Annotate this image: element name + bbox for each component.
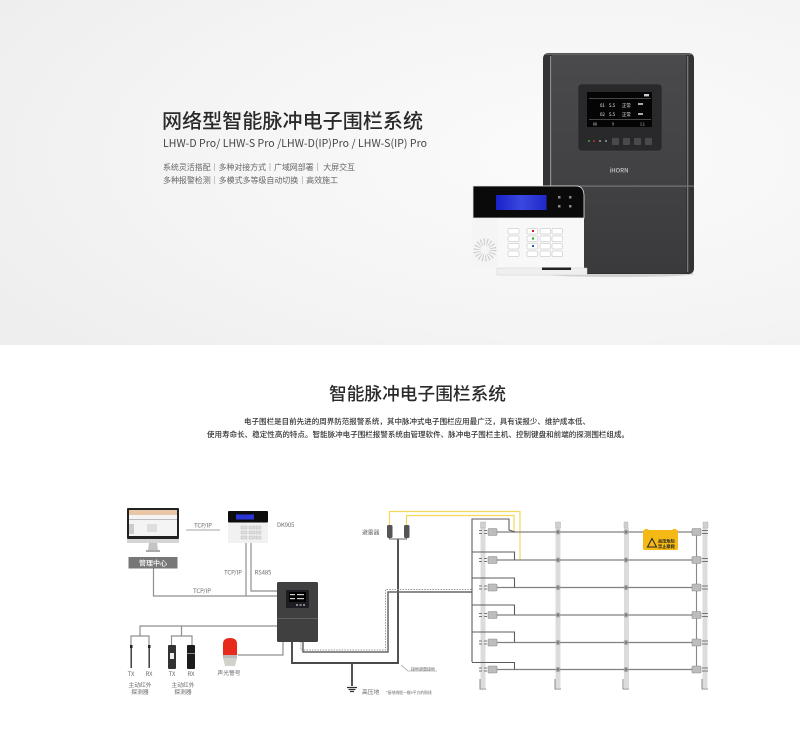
diagram labels: RX [146, 669, 153, 678]
control panel: 5.5 [609, 112, 616, 118]
fence posts [480, 522, 708, 689]
management center monitor [127, 508, 179, 552]
diagram labels: 声光警号 [217, 668, 241, 677]
diagram labels: 避雷器 [362, 528, 380, 536]
lightning arresters [387, 525, 410, 539]
ground symbol [347, 688, 357, 692]
control panel [578, 84, 662, 151]
control panel: 5.5 [609, 103, 616, 109]
double arrow: TCP/IP link [186, 529, 220, 531]
control panel: 9 [612, 122, 614, 128]
network wiring [131, 543, 283, 668]
section heading: 智能脉冲电子围栏系统 [329, 380, 506, 406]
yellow lightning arrester wires [390, 512, 520, 560]
grounding note arrow [401, 665, 437, 671]
diagram labels: 主动红外 [128, 680, 152, 689]
hero title: 网络型智能脉冲电子围栏系统 [162, 105, 423, 134]
control panel: 1.1 [640, 122, 645, 128]
brand logo: iHORN [609, 166, 629, 174]
control panel: 02 [600, 112, 605, 118]
section description [207, 416, 629, 440]
hero features: 系统灵活搭配｜多种对接方式｜广域网部署｜ 大屏交互 [163, 162, 355, 173]
fence bus wiring [472, 519, 696, 670]
blue LCD [496, 195, 546, 210]
diagram [127, 508, 708, 696]
diagram labels: 接地避雷接地 [411, 666, 435, 672]
diagram labels: 探测器 [174, 687, 192, 696]
mini keypad DK905 [228, 511, 268, 543]
warning sign: 禁止攀爬 [658, 543, 676, 550]
mini controller [277, 582, 318, 642]
diagram labels: 主动红外 [171, 680, 195, 689]
control panel: 68 [593, 122, 597, 128]
diagram labels: 高压地 [362, 687, 380, 696]
product: alarm keypad [472, 186, 587, 275]
control panel: 正常 [622, 102, 631, 109]
hero features [163, 162, 355, 186]
diagram labels: TX [169, 669, 176, 678]
fence insulators [479, 528, 708, 673]
section description: 电子围栏是目前先进的周界防范报警系统，其中脉冲式电子围栏应用最广泛，具有误报少、维护成本低、 [244, 416, 590, 427]
diagram labels: TCP/IP [193, 586, 211, 595]
diagram labels: *接地线缆一根6平方的铜线 [386, 690, 432, 696]
product: large fence controller [542, 53, 694, 277]
diagram labels: 探测器 [131, 687, 149, 696]
hero model numbers: LHW-D Pro/ LHW-S Pro /LHW-D(IP)Pro / LHW-S(IP) Pro [163, 136, 427, 151]
sound and light alarm [223, 638, 237, 666]
control panel: 01 [600, 103, 605, 109]
grounding and high voltage cables [292, 539, 472, 686]
fence wires [497, 532, 697, 670]
diagram labels [128, 520, 435, 696]
management center label: 管理中心 [139, 558, 167, 568]
diagram labels: DK905 [277, 520, 294, 529]
infrared detectors [130, 645, 195, 669]
warning sign: 高压危险 [658, 538, 676, 544]
warning sign [643, 529, 678, 550]
hero background [0, 0, 800, 345]
diagram labels: TCP/IP [194, 520, 212, 530]
section description: 使用寿命长、稳定性高的特点。智能脉冲电子围栏报警系统由管理软件、脉冲电子围栏主机、控制键盘和前端的探测围栏组成。 [207, 429, 629, 440]
diagram labels: RX [188, 669, 195, 678]
diagram labels: TX [128, 669, 135, 678]
speaker grille [477, 242, 493, 258]
control panel: 正常 [622, 111, 631, 118]
diagram labels: RS485 [255, 568, 271, 576]
management center label [128, 557, 178, 568]
hero features: 多种报警检测｜多模式多等级自动切换｜高效施工 [163, 175, 338, 186]
diagram labels: TCP/IP [224, 568, 242, 576]
